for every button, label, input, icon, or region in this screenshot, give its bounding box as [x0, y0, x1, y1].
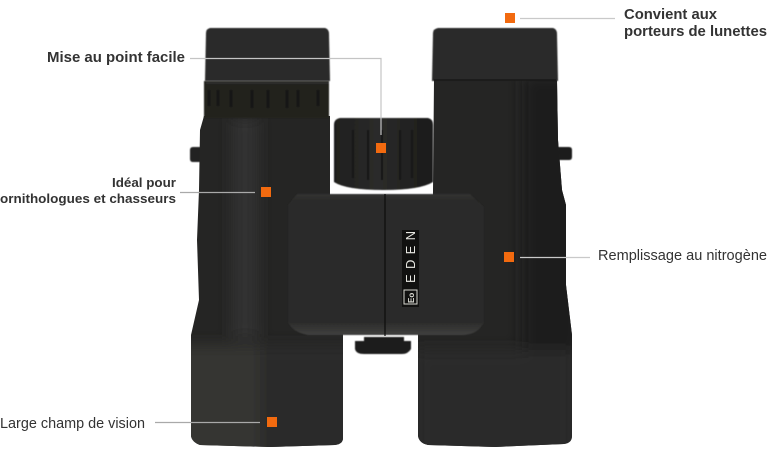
left hinge knob: [190, 147, 207, 162]
marker: right barrel: [504, 252, 514, 262]
left focus ring: [204, 81, 329, 118]
callout lines: [155, 18, 615, 422]
right hinge knob: [555, 147, 572, 160]
label: Convient aux porteurs de lunettes: porteurs de lunettes: [624, 24, 767, 40]
marker: bottom barrel: [267, 417, 277, 427]
lower focus knob: [355, 337, 411, 354]
label: Convient aux porteurs de lunettes: Convient aux: [624, 7, 717, 23]
marker: left barrel: [261, 187, 271, 197]
label: Convient aux porteurs de lunettes: [624, 7, 767, 40]
eyecup seam: [434, 79, 556, 81]
label: Idéal pour ornithologues et chasseurs: ornithologues et chasseurs: [0, 192, 176, 206]
label: Idéal pour ornithologues et chasseurs: Idéal pour: [112, 176, 176, 190]
left barrel body: [191, 116, 343, 447]
logo box: Eo: [407, 293, 416, 303]
label: Large champ de vision: Large champ de vision: [0, 415, 145, 432]
EDEN wordmark: EDEN: [403, 231, 418, 283]
right eyecup: [432, 28, 558, 81]
marker: top eyecup: [505, 13, 515, 23]
right barrel body: [418, 80, 572, 447]
label: Idéal pour ornithologues et chasseurs: [0, 176, 176, 206]
focus wheel: [334, 118, 433, 190]
label: Remplissage au nitrogène: Remplissage au nitrogène: [598, 247, 767, 264]
binoculars: [189, 27, 573, 447]
EDEN badge: [402, 230, 419, 307]
marker: focus wheel: [376, 143, 386, 153]
left eyecup: [205, 28, 330, 81]
centre bridge: [288, 194, 484, 335]
bridge centre line: [384, 194, 386, 336]
label: Mise au point facile: Mise au point facile: [47, 50, 185, 66]
